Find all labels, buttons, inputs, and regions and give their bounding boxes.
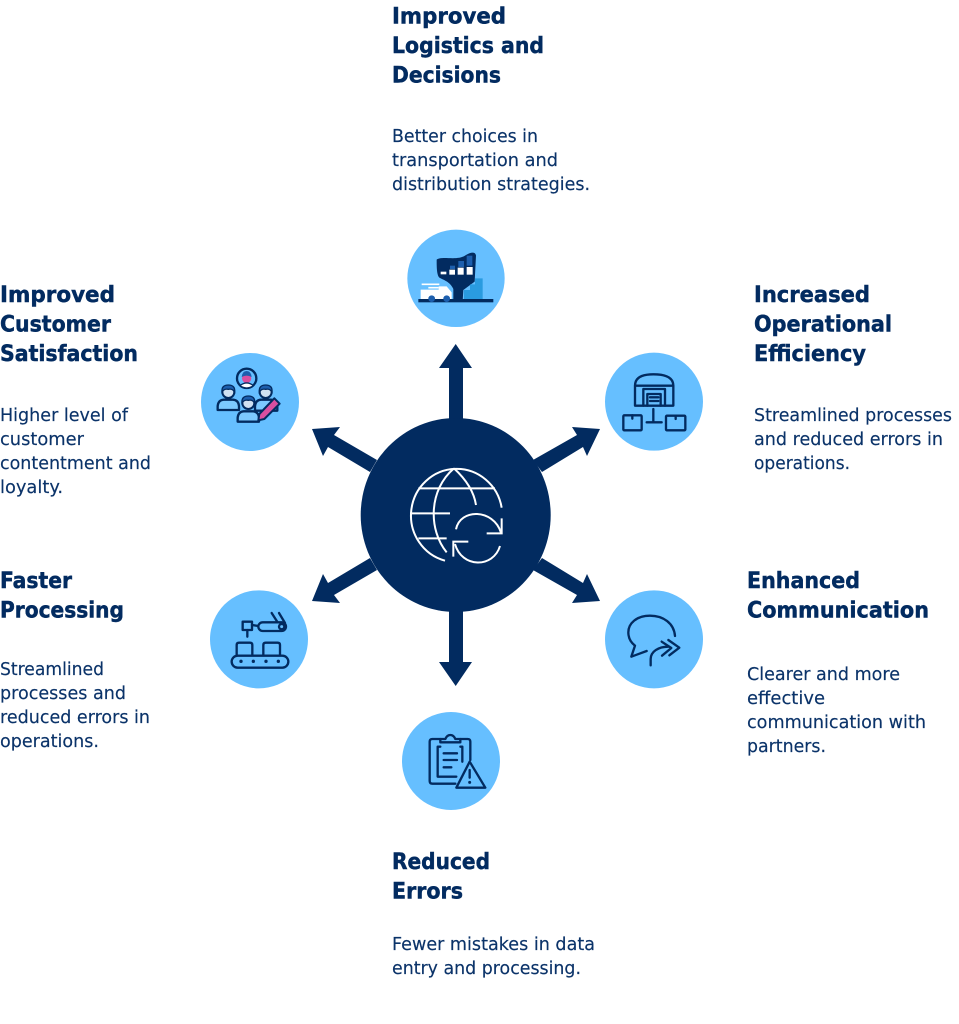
heading: Communication bbox=[747, 598, 929, 624]
description: distribution strategies. bbox=[392, 175, 590, 195]
description: operations. bbox=[754, 454, 850, 474]
heading: Reduced bbox=[392, 850, 490, 875]
panel: enhanced communication bbox=[605, 569, 929, 757]
icon: warehouse network bbox=[605, 353, 703, 451]
description bbox=[747, 665, 926, 757]
heading: Efficiency bbox=[754, 342, 866, 367]
description: contentment and bbox=[0, 454, 151, 474]
heading bbox=[392, 850, 490, 904]
description: Clearer and more bbox=[747, 665, 900, 685]
description: Streamlined bbox=[0, 660, 104, 680]
description: effective bbox=[747, 689, 825, 709]
heading: Operational bbox=[754, 312, 892, 338]
description: reduced errors in bbox=[0, 708, 150, 728]
panel: faster processing bbox=[0, 569, 308, 752]
description: Higher level of bbox=[0, 406, 129, 426]
description: transportation and bbox=[392, 151, 558, 171]
icon: conveyor robot arm bbox=[210, 590, 308, 688]
arrows bbox=[312, 344, 600, 686]
description: loyalty. bbox=[0, 478, 63, 498]
heading bbox=[0, 569, 124, 624]
description bbox=[0, 660, 150, 752]
description bbox=[392, 127, 590, 195]
heading: Processing bbox=[0, 598, 124, 624]
heading bbox=[747, 569, 929, 624]
heading: Improved bbox=[0, 283, 115, 308]
heading: Satisfaction bbox=[0, 342, 138, 367]
description bbox=[754, 406, 952, 474]
hub circle bbox=[361, 418, 551, 612]
panel: reduced errors bbox=[392, 712, 595, 979]
description: operations. bbox=[0, 732, 99, 752]
description: and reduced errors in bbox=[754, 430, 943, 450]
panel: improved logistics bbox=[392, 4, 590, 327]
heading bbox=[392, 4, 544, 88]
description: entry and processing. bbox=[392, 959, 581, 979]
icon: clipboard with warning bbox=[402, 712, 500, 810]
icon: people and pencil bbox=[201, 353, 299, 451]
heading: Faster bbox=[0, 569, 72, 594]
heading: Errors bbox=[392, 880, 463, 904]
icon: globe with refresh arrows bbox=[410, 468, 502, 563]
panel: customer satisfaction bbox=[0, 283, 299, 498]
description: customer bbox=[0, 430, 85, 450]
central hub with arrows bbox=[312, 344, 600, 686]
heading bbox=[0, 283, 138, 367]
heading bbox=[754, 283, 892, 367]
description: communication with bbox=[747, 713, 926, 733]
icon: truck and warehouse chart bbox=[407, 230, 505, 327]
description bbox=[392, 935, 595, 979]
heading: Decisions bbox=[392, 64, 501, 88]
description: partners. bbox=[747, 737, 826, 757]
description: Streamlined processes bbox=[754, 406, 952, 426]
description: Better choices in bbox=[392, 127, 538, 147]
panel: operational efficiency bbox=[605, 283, 952, 474]
description bbox=[0, 406, 151, 498]
description: Fewer mistakes in data bbox=[392, 935, 595, 955]
heading: Enhanced bbox=[747, 569, 860, 594]
heading: Customer bbox=[0, 312, 111, 338]
heading: Improved bbox=[392, 4, 506, 30]
heading: Logistics and bbox=[392, 34, 544, 59]
icon: speech bubble with arrows bbox=[605, 590, 703, 688]
description: processes and bbox=[0, 684, 126, 704]
heading: Increased bbox=[754, 283, 870, 308]
